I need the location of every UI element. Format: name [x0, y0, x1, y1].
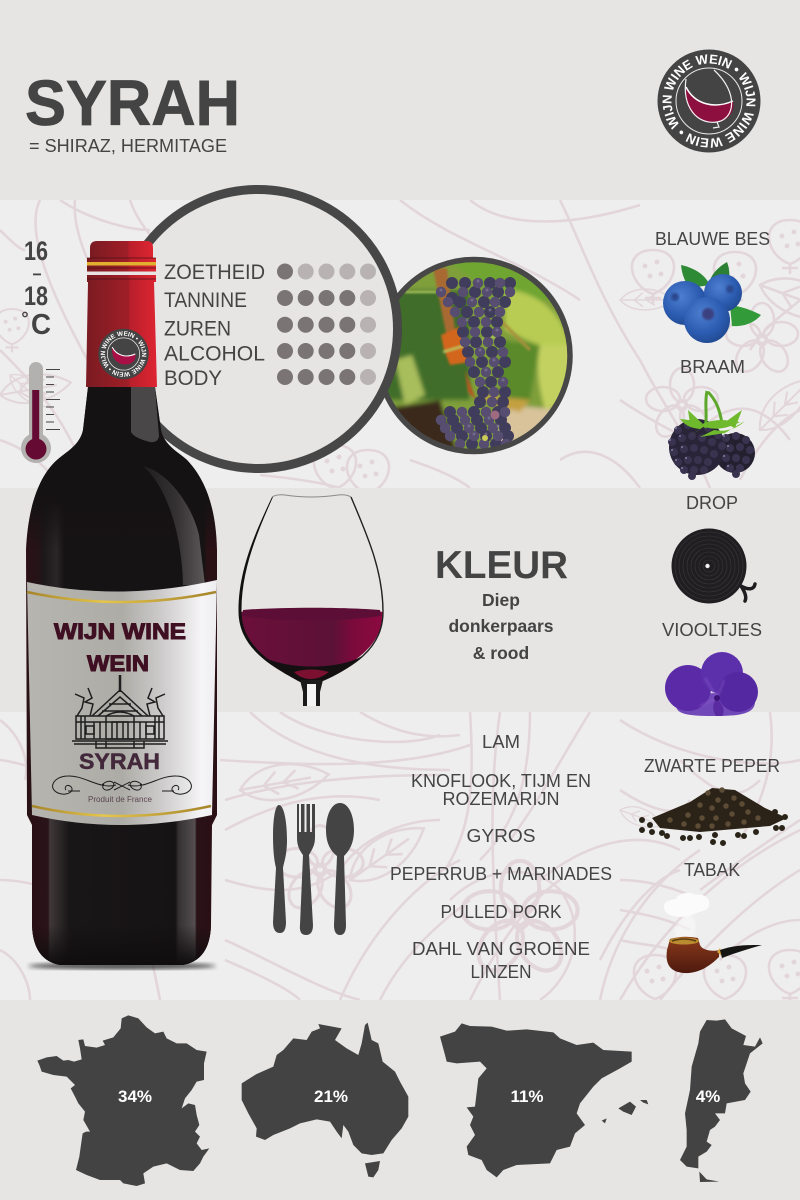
label illustration: temple — [72, 675, 168, 748]
value: Spain share: 11% — [510, 1087, 544, 1106]
icon: violet flower — [665, 652, 758, 716]
map: France — [37, 1015, 209, 1186]
dots: zoetheid rating — [277, 264, 376, 280]
panel: floral band bottom — [0, 712, 800, 1000]
food pairing list — [390, 731, 612, 982]
value: Australia share: 21% — [314, 1087, 348, 1106]
colour description: donkerpaars — [448, 616, 554, 636]
icon: liquorice wheel — [672, 528, 755, 604]
bottle label — [27, 580, 217, 825]
label: tannine: TANNINE — [164, 289, 247, 312]
label text: syrah: SYRAH — [79, 749, 160, 774]
dots: body rating — [277, 369, 376, 385]
temperature range: C — [31, 309, 51, 341]
dots: zuren rating — [277, 317, 376, 333]
icon: cutlery — [273, 803, 354, 935]
colour description: Diep — [482, 590, 520, 610]
colour description — [448, 590, 554, 663]
pairing: peperrub: PEPERRUB + MARINADES — [390, 863, 612, 884]
map: Spain — [440, 1023, 648, 1177]
bottle capsule — [86, 241, 157, 387]
grape photo circle — [384, 256, 573, 454]
icon: blackberry — [669, 391, 755, 476]
logo: Wijn Wine Wein: WINE WEIN • WIJN WINE WEIN • WIJN — [662, 54, 756, 148]
pairing: linzen: LINZEN — [470, 961, 532, 982]
label: body: BODY — [164, 367, 222, 390]
temperature range — [23, 236, 51, 341]
label: alcohol: ALCOHOL — [164, 342, 265, 366]
subtitle: synonyms: = SHIRAZ, HERMITAGE — [29, 135, 227, 156]
dots: tannine rating — [277, 290, 376, 306]
temperature range: 18 — [24, 281, 48, 311]
icon: peppercorns — [642, 788, 787, 843]
aroma label: drop: DROP — [686, 492, 738, 513]
aroma label: blauwe bes: BLAUWE BES — [655, 228, 770, 249]
pairing: lam: LAM — [482, 731, 520, 752]
label text: brand: WIJN WINE — [54, 619, 186, 644]
pairing: pulled pork: PULLED PORK — [440, 901, 562, 922]
wine glass — [238, 495, 383, 706]
aroma label: tabak: TABAK — [684, 859, 741, 880]
label: zuren: ZUREN — [164, 318, 231, 340]
icon: blueberries — [663, 262, 761, 343]
wine bottle — [26, 241, 218, 970]
heading: kleur: KLEUR — [435, 544, 568, 587]
colour description: & rood — [473, 643, 529, 663]
icon: thermometer — [21, 362, 60, 463]
value: Argentina share: 4% — [696, 1087, 720, 1106]
title: SYRAH — [25, 67, 240, 139]
label flourish — [53, 776, 191, 794]
panel: floral band top — [0, 200, 800, 488]
pairing: knoflook: KNOFLOOK, TIJM EN — [411, 770, 591, 791]
icon: pipe with smoke — [664, 893, 762, 973]
pairing: gyros: GYROS — [466, 825, 536, 846]
value: France share: 34% — [118, 1087, 152, 1106]
pairing: rozemarijn: ROZEMARIJN — [442, 788, 560, 809]
label text: wein: WEIN — [87, 651, 149, 676]
label text: origin: Produit de France — [88, 795, 153, 804]
aroma label: viooltjes: VIOOLTJES — [662, 619, 762, 640]
aroma label: braam: BRAAM — [680, 356, 745, 377]
temperature range: 16 — [24, 236, 48, 266]
panel: taste profile circle — [118, 190, 398, 468]
dots: alcohol rating — [277, 343, 376, 359]
label: zoetheid: ZOETHEID — [164, 261, 265, 284]
map: Argentina — [680, 1019, 763, 1182]
pairing: dahl: DAHL VAN GROENE — [412, 938, 590, 959]
map: Australia — [242, 1023, 408, 1177]
aroma label: zwarte peper: ZWARTE PEPER — [644, 755, 780, 776]
capsule logo: WINE WEIN • WIJN WINE WEIN • WIJN — [100, 331, 146, 377]
